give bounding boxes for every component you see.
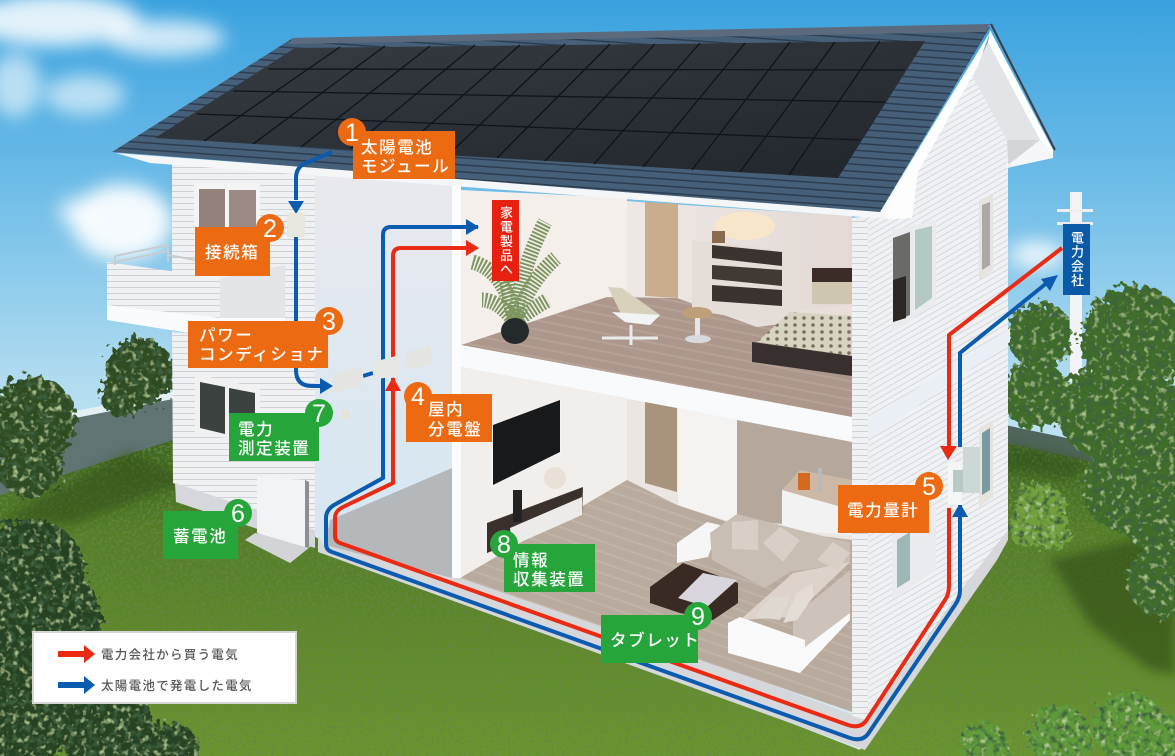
lower room side wall (461, 367, 627, 578)
label 8: data collector: 情報 (513, 551, 549, 570)
label: power company (1063, 224, 1090, 295)
eave underside (116, 153, 888, 219)
background boundary wall (0, 392, 1100, 495)
roof ridge (288, 24, 990, 44)
label 5: power meter (838, 472, 943, 533)
side table (677, 522, 720, 563)
balcony (107, 245, 285, 338)
lower room back wall (461, 367, 852, 712)
lawn (0, 440, 1175, 756)
label 2: junction box: 2 (263, 215, 277, 243)
label 4: distribution board: 屋内 (428, 400, 464, 419)
wall band (868, 328, 1010, 440)
indoor panel units (373, 346, 431, 380)
kitchen island (782, 468, 852, 535)
legend: solar electricity: 太陽電池で発電した電気 (101, 678, 253, 693)
side upper window (892, 220, 936, 333)
legend: purchased electricity (58, 645, 239, 663)
label 3: power conditioner (188, 307, 343, 368)
battery unit (245, 477, 315, 563)
arrowheads: household wires (385, 219, 1058, 517)
label 8: data collector (490, 530, 595, 592)
upper window (194, 183, 260, 233)
label 4: distribution board: 4 (411, 383, 425, 411)
power meter (948, 447, 980, 505)
label 5: power meter: 5 (922, 473, 936, 501)
foundation strip along cut (318, 520, 1008, 750)
TV console (487, 467, 583, 553)
label 8: data collector: 8 (497, 531, 511, 559)
blue wire: household and sell line (326, 227, 1048, 739)
corner brick strip (852, 218, 868, 720)
side lower window (892, 505, 936, 600)
lower window (195, 374, 260, 445)
label: to home appliances (492, 200, 519, 281)
chair and stool (602, 287, 712, 345)
blue wire: solar output (296, 152, 373, 386)
center divider wall (452, 185, 461, 578)
label 1: solar module: 1 (345, 119, 359, 147)
right side wall (852, 75, 1008, 720)
lower left brick wall (172, 332, 315, 530)
solar panels (155, 41, 925, 178)
lower room floor (460, 480, 852, 712)
label 4: distribution board: 分電盤 (428, 420, 482, 439)
gable fascia (988, 24, 1055, 158)
upper room side wall (461, 190, 627, 345)
trees (0, 286, 1175, 756)
TV (491, 399, 561, 487)
label 9: tablet: 9 (691, 603, 705, 631)
power conditioner (332, 366, 363, 393)
legend: purchased electricity: 電力会社から買う電気 (101, 647, 239, 662)
left cut floor (325, 468, 452, 578)
label 3: power conditioner: コンディショナ (199, 344, 325, 364)
bed (752, 268, 852, 376)
label 6: storage battery (163, 499, 252, 559)
white side wall section (315, 175, 452, 548)
wall switch (342, 410, 350, 419)
label 7: measuring device: 7 (312, 400, 326, 428)
potted plant (472, 222, 556, 344)
label 5: power meter: 電力量計 (847, 501, 919, 520)
legend (33, 632, 296, 703)
label: to home appliances: 家電製品へ (498, 205, 513, 277)
house (107, 24, 1055, 750)
label 1: solar module: モジュール (361, 158, 450, 176)
label 9: tablet (601, 602, 712, 663)
legend: solar electricity (58, 676, 253, 694)
arrowheads: solar wire (288, 201, 333, 394)
label 2: junction box (195, 214, 284, 276)
upper left brick wall (172, 163, 315, 330)
barge board (880, 32, 990, 219)
label 4: distribution board (404, 382, 492, 442)
partition wall (678, 408, 737, 524)
label 6: storage battery: 蓄電池 (173, 527, 227, 546)
foundation (175, 483, 315, 548)
side small windows (979, 195, 993, 507)
utility pole (1057, 192, 1093, 382)
coffee table (650, 563, 738, 620)
label 2: junction box: 接続箱 (205, 243, 259, 262)
sofa (710, 514, 850, 673)
label 3: power conditioner: パワー (199, 326, 253, 345)
label 7: measuring device (229, 399, 333, 461)
label 9: tablet: タブレット (610, 630, 700, 650)
upper room floor (461, 297, 852, 417)
roof (112, 27, 990, 212)
label 6: storage battery: 6 (231, 500, 245, 528)
label 7: measuring device: 電力 (238, 420, 274, 439)
label: power company: 電力会社 (1069, 231, 1084, 288)
label 1: solar module (338, 118, 455, 179)
gable soffit (972, 38, 1053, 168)
label 3: power conditioner: 3 (322, 308, 336, 336)
junction box (287, 213, 305, 237)
red wire: purchased electricity (335, 248, 1062, 726)
kitchen (737, 420, 852, 530)
lower door (645, 402, 677, 492)
label 7: measuring device: 測定装置 (238, 439, 310, 458)
lawn shadows (0, 445, 1175, 675)
shelves (692, 212, 785, 325)
clouds (0, 0, 1065, 269)
label 1: solar module: 太陽電池 (361, 138, 433, 157)
label 8: data collector: 収集装置 (513, 570, 585, 589)
upper door (645, 202, 678, 298)
upper room back wall (461, 190, 852, 420)
floor slab (461, 345, 852, 442)
